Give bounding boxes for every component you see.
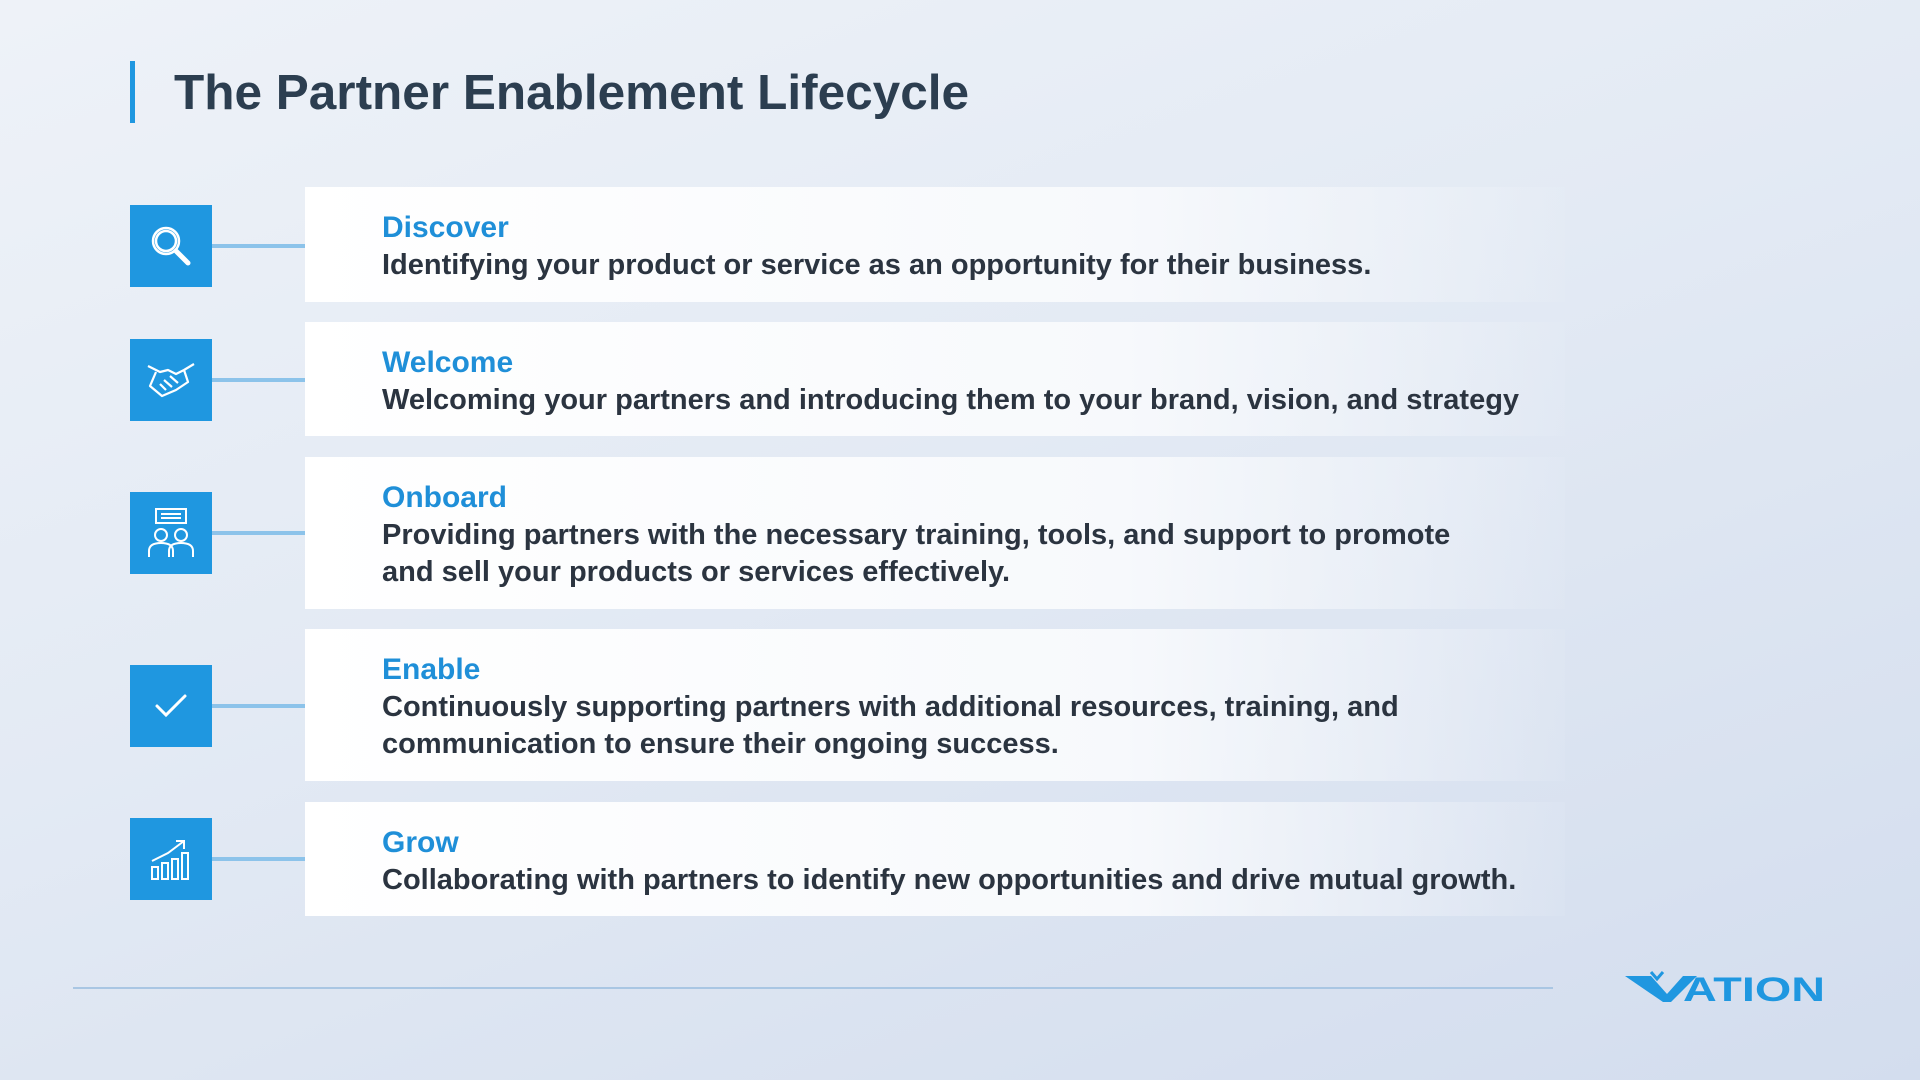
logo	[1625, 971, 1825, 1006]
title: The Partner Enablement Lifecycle	[174, 65, 969, 120]
icon: magnifier	[130, 205, 212, 287]
icon: growth chart	[130, 818, 212, 900]
icon: people with board	[130, 492, 212, 574]
icon: check	[130, 665, 212, 747]
card: Discover: Discover	[382, 211, 509, 244]
card: Grow	[305, 802, 1565, 916]
card: Grow: Grow	[382, 826, 459, 858]
card: Welcome: Welcome	[382, 346, 513, 378]
card: Discover: Identifying your product or service as an opportunity for their business.	[382, 249, 1371, 281]
card: Onboard: and sell your products or services effectively.	[382, 556, 1010, 588]
card: Welcome: Welcoming your partners and introducing them to your brand, vision, and strategy	[382, 384, 1519, 416]
card: Onboard	[305, 457, 1565, 609]
card: Enable: Continuously supporting partners with additional resources, training, and	[382, 691, 1399, 723]
icon: handshake	[130, 339, 212, 421]
card: Onboard: Providing partners with the necessary training, tools, and support to promote	[382, 519, 1450, 551]
card: Grow: Collaborating with partners to identify new opportunities and drive mutual growth.	[382, 864, 1516, 896]
card: Onboard: Onboard	[382, 481, 507, 514]
card: Discover	[305, 187, 1565, 302]
card: Enable	[305, 629, 1565, 781]
card: Enable: Enable	[382, 653, 480, 686]
card: Welcome	[305, 322, 1565, 436]
card: Enable: communication to ensure their ongoing success.	[382, 728, 1059, 760]
